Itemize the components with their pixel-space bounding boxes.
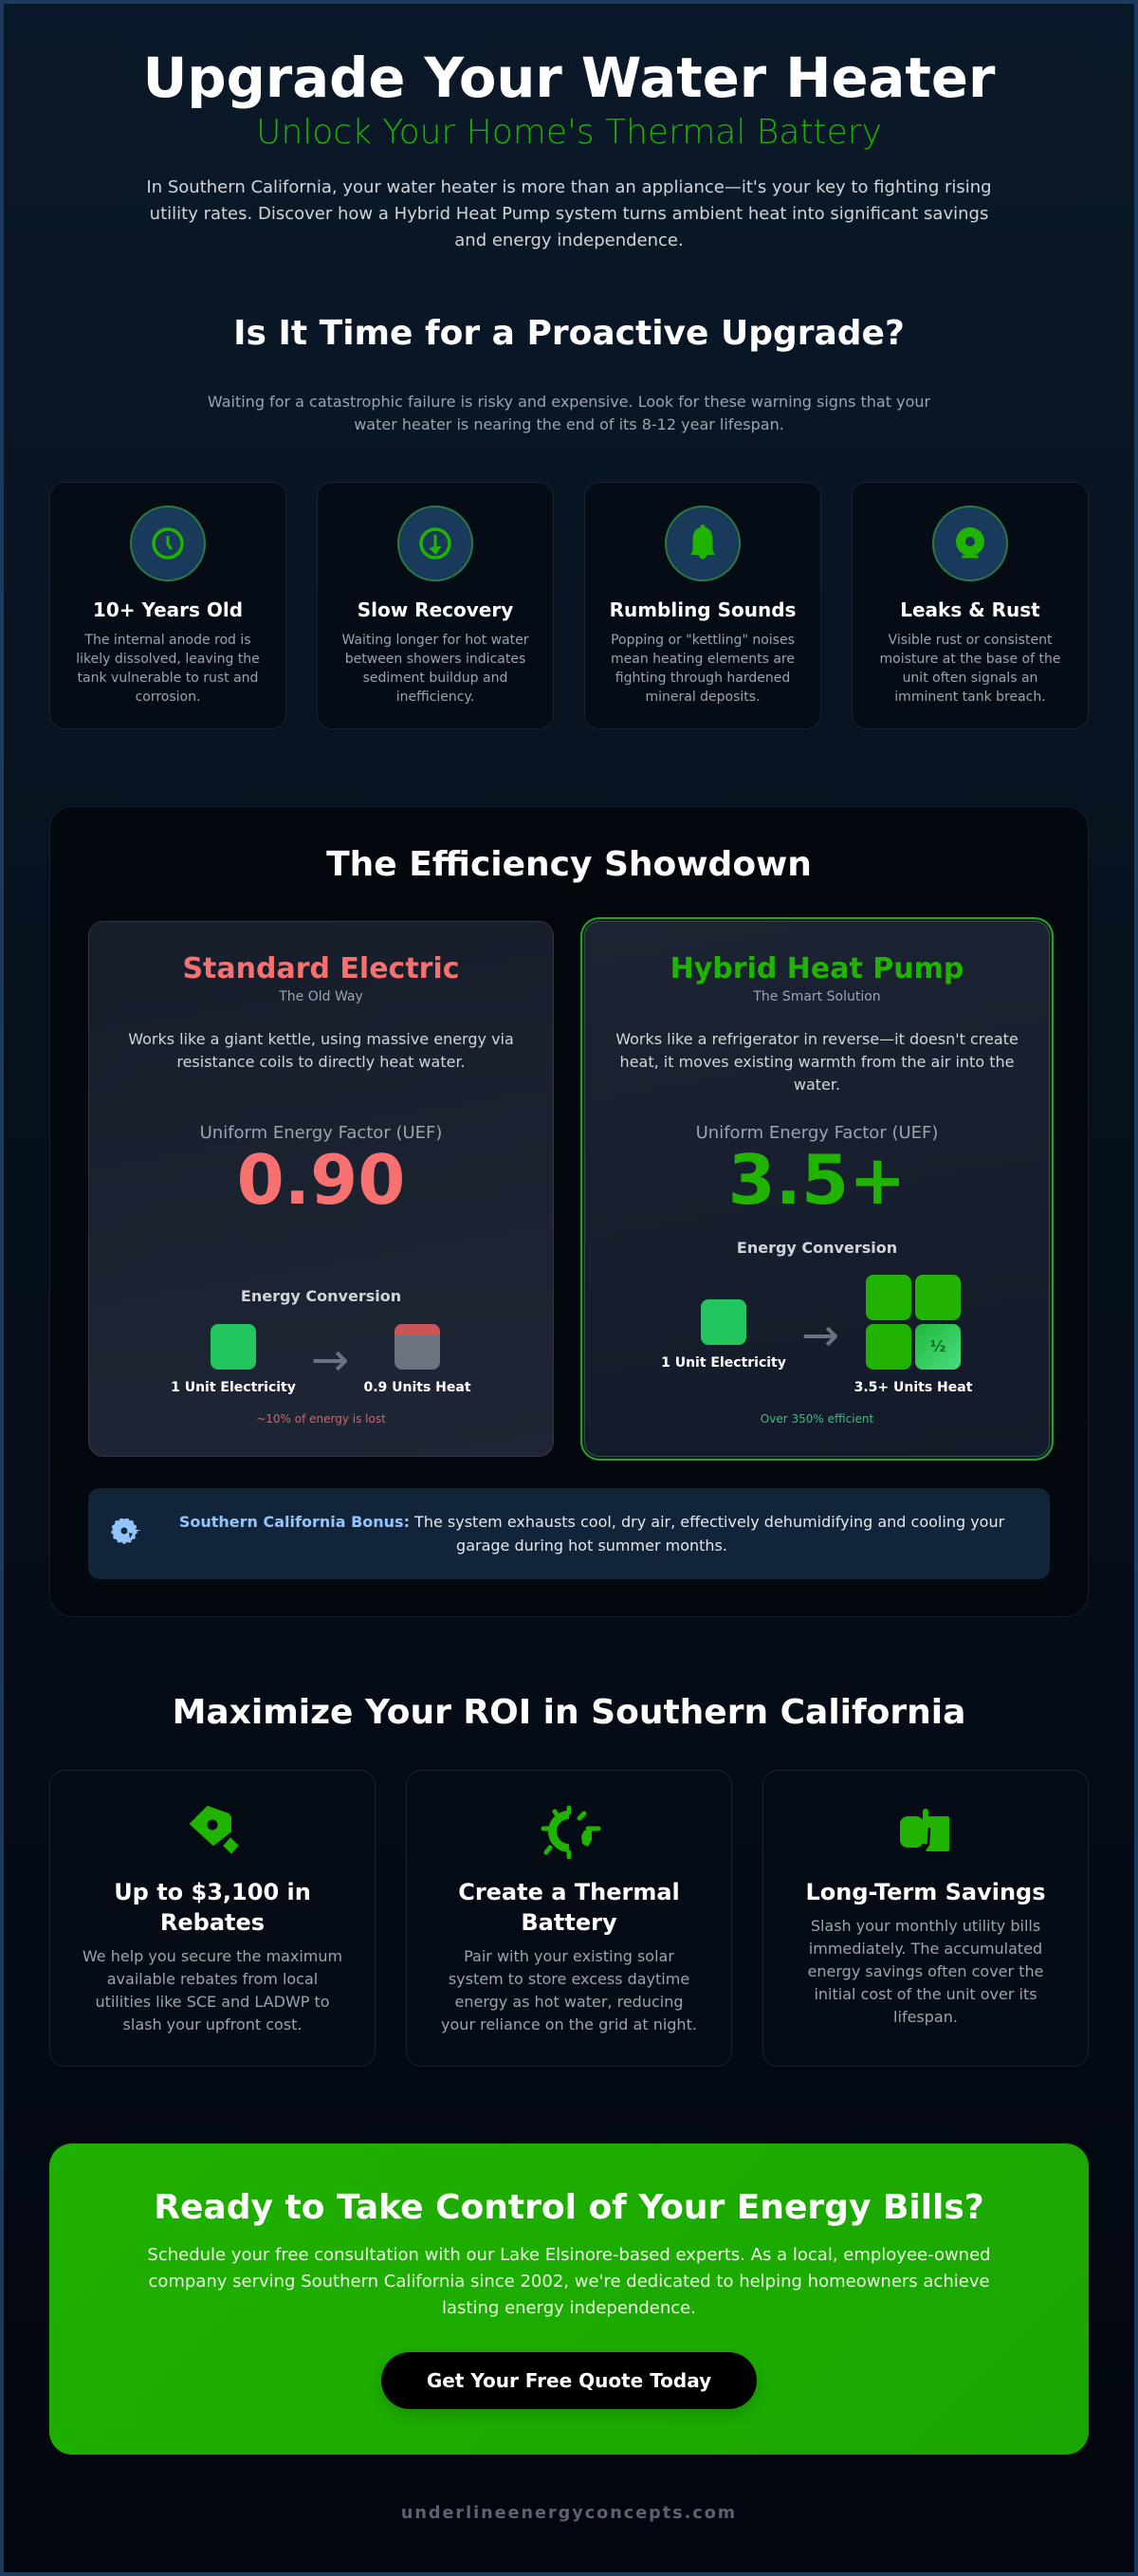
uef value: 3.5+	[728, 1140, 906, 1220]
panel: slow recovery	[317, 482, 554, 729]
card text: inefficiency.	[396, 690, 474, 705]
card title: Create a Thermal	[458, 1879, 680, 1905]
card text: moisture at the base of the	[880, 652, 1060, 667]
card text	[441, 1947, 697, 2033]
card title: Leaks & Rust	[900, 598, 1040, 621]
card title: Hybrid Heat Pump	[670, 952, 964, 985]
heat unit 2	[915, 1275, 961, 1320]
card text: slash your upfront cost.	[123, 2015, 302, 2033]
description: Works like a refrigerator in reverse—it doesn't create	[615, 1030, 1019, 1048]
card text: energy as hot water, reducing	[454, 1993, 683, 2011]
card title: Slow Recovery	[358, 598, 513, 621]
heat unit 3	[866, 1324, 911, 1370]
uef label: Uniform Energy Factor (UEF)	[200, 1123, 442, 1143]
panel: rumbling sounds	[584, 482, 821, 729]
card text	[611, 633, 795, 705]
card text	[808, 1917, 1043, 2026]
uef value: 0.90	[237, 1140, 405, 1220]
card text: sediment buildup and	[363, 671, 507, 686]
icon: bonus	[111, 1518, 141, 1544]
efficiency note: Over 350% efficient	[761, 1412, 873, 1426]
panel: hybrid heat pump	[584, 921, 1050, 1457]
heat units grid	[866, 1275, 961, 1370]
card title: Standard Electric	[182, 952, 460, 985]
card text: corrosion.	[136, 690, 200, 705]
cta button: Get Your Free Quote Today	[427, 2369, 711, 2392]
bonus text: garage during hot summer months.	[456, 1536, 727, 1555]
description: heat, it moves existing warmth from the air into the	[620, 1053, 1014, 1071]
description: resistance coils to directly heat water.	[176, 1053, 466, 1071]
heading: proactive upgrade: Is It Time for a Proactive Upgrade?	[233, 314, 905, 353]
half heat unit	[915, 1324, 961, 1370]
card text: The internal anode rod is	[84, 633, 251, 648]
card text: Popping or "kettling" noises	[611, 633, 795, 648]
energy conversion label: Energy Conversion	[737, 1239, 897, 1257]
panel: rebates	[49, 1770, 376, 2067]
card title	[114, 1879, 311, 1936]
card title: Rebates	[160, 1909, 265, 1936]
card text: likely dissolved, leaving the	[76, 652, 260, 667]
panel: thermal battery	[406, 1770, 732, 2067]
heat unit 1	[866, 1275, 911, 1320]
intro text: and energy independence.	[454, 230, 684, 250]
arrow: →	[311, 1334, 349, 1387]
card text: We help you secure the maximum	[83, 1947, 342, 1965]
card text: lifespan.	[893, 2008, 958, 2026]
card text	[76, 633, 260, 705]
icon: clock with down arrow	[397, 506, 473, 581]
card text: utilities like SCE and LADWP to	[95, 1993, 330, 2011]
cta text	[147, 2245, 991, 2318]
card text: available rebates from local	[107, 1970, 318, 1988]
cta text: company serving Southern California since 2002, we're dedicated to helping homeowners achieve	[148, 2272, 990, 2291]
icon: price tag	[190, 1806, 239, 1853]
card text: fighting through hardened	[615, 671, 790, 686]
unit label: 1 Unit Electricity	[171, 1380, 296, 1395]
intro text	[146, 177, 992, 250]
warning signs intro: water heater is nearing the end of its 8-12 year lifespan.	[354, 415, 784, 433]
heading: maximize roi: Maximize Your ROI in Southern California	[173, 1693, 965, 1732]
unit: heat	[395, 1324, 440, 1370]
title: Upgrade Your Water Heater	[143, 46, 995, 110]
call to action panel	[49, 2144, 1089, 2455]
description	[128, 1030, 514, 1071]
heading: efficiency showdown: The Efficiency Showdown	[326, 845, 812, 884]
heat label: 0.9 Units Heat	[363, 1380, 471, 1395]
card text	[880, 633, 1060, 705]
unit: electricity	[211, 1324, 256, 1370]
subtitle: Unlock Your Home's Thermal Battery	[256, 113, 882, 152]
cta heading: Ready to Take Control of Your Energy Bills?	[154, 2188, 984, 2227]
footer url: underlineenergyconcepts.com	[401, 2504, 737, 2523]
heat label: 3.5+ Units Heat	[854, 1380, 972, 1395]
card text: Visible rust or consistent	[889, 633, 1052, 648]
card text: between showers indicates	[345, 652, 525, 667]
card text: Slash your monthly utility bills	[811, 1917, 1040, 1935]
description	[615, 1030, 1019, 1094]
warning signs intro	[208, 393, 931, 433]
unit: electricity	[701, 1299, 746, 1345]
card text: tank vulnerable to rust and	[78, 671, 258, 686]
panel: standard electric	[88, 921, 554, 1457]
energy conversion label: Energy Conversion	[241, 1287, 401, 1305]
card title: Battery	[521, 1909, 617, 1936]
card title: Long-Term Savings	[805, 1879, 1046, 1905]
card text	[341, 633, 529, 705]
bonus text: Southern California Bonus: The system exhausts cool, dry air, effectively dehumidifying and cooling your	[179, 1513, 1004, 1531]
warning signs intro: Waiting for a catastrophic failure is risky and expensive. Look for these warning signs that your	[208, 393, 930, 411]
callout: southern california bonus	[88, 1488, 1050, 1579]
uef label: Uniform Energy Factor (UEF)	[696, 1123, 938, 1143]
icon: savings	[900, 1809, 949, 1851]
card subtitle: The Smart Solution	[753, 989, 881, 1004]
description: Works like a giant kettle, using massive energy via	[128, 1030, 514, 1048]
unit label: 1 Unit Electricity	[661, 1355, 786, 1371]
panel: 10+ years old	[49, 482, 286, 729]
intro text: In Southern California, your water heater is more than an appliance—it's your key to fighting rising	[146, 177, 992, 197]
card text: Pair with your existing solar	[464, 1947, 674, 1965]
card text: system to store excess daytime	[449, 1970, 689, 1988]
card text: unit often signals an	[903, 671, 1037, 686]
card title	[458, 1879, 680, 1936]
card text: your reliance on the grid at night.	[441, 2015, 697, 2033]
icon: clock	[130, 506, 206, 581]
cta text: Schedule your free consultation with our Lake Elsinore-based experts. As a local, employee-owned	[147, 2245, 991, 2265]
icon: sun crescent	[541, 1806, 601, 1859]
card text: Waiting longer for hot water	[341, 633, 529, 648]
card subtitle: The Old Way	[279, 989, 363, 1004]
cta text: lasting energy independence.	[442, 2298, 696, 2318]
cta button	[381, 2352, 757, 2409]
description: water.	[794, 1076, 840, 1094]
intro text: utility rates. Discover how a Hybrid Heat Pump system turns ambient heat into significant savings	[150, 204, 988, 224]
card title: Up to $3,100 in	[114, 1879, 311, 1905]
panel: leaks and rust	[852, 482, 1089, 729]
card title: Rumbling Sounds	[610, 598, 796, 621]
card text: energy savings often cover the	[808, 1962, 1043, 1980]
card text: mean heating elements are	[611, 652, 795, 667]
card text: mineral deposits.	[645, 690, 761, 705]
card text: immediately. The accumulated	[809, 1940, 1042, 1958]
bonus text	[179, 1513, 1005, 1555]
panel: efficiency showdown	[49, 806, 1089, 1617]
loss note: ~10% of energy is lost	[256, 1412, 386, 1426]
icon: leak	[932, 506, 1008, 581]
card text: initial cost of the unit over its	[814, 1985, 1037, 2003]
card title: 10+ Years Old	[93, 598, 243, 621]
panel: long-term savings	[762, 1770, 1089, 2067]
card text: imminent tank breach.	[894, 690, 1046, 705]
arrow: →	[801, 1309, 839, 1362]
half heat unit: ½	[930, 1337, 945, 1355]
card text	[83, 1947, 342, 2033]
icon: bell	[665, 506, 741, 581]
